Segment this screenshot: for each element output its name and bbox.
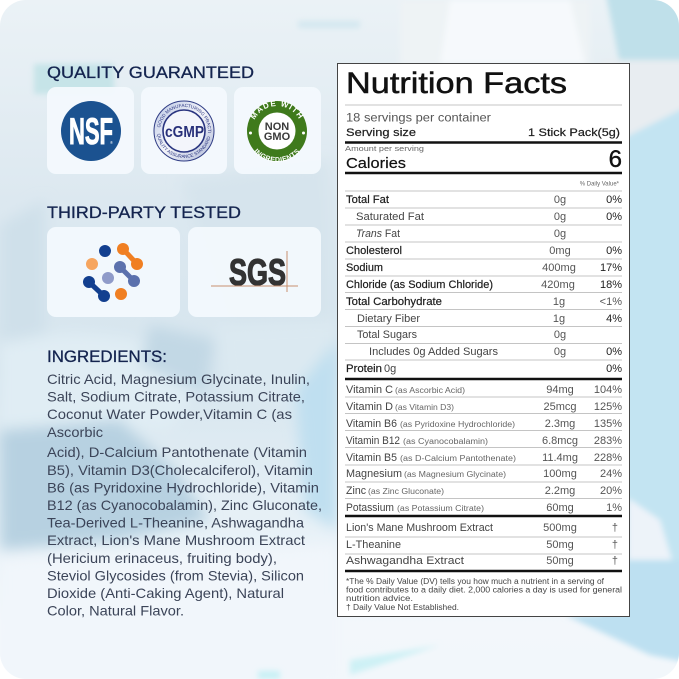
text block: ingredients list: Tea-Derived L-Theanine, Ashwagandha — [47, 514, 304, 530]
text block: ingredients list: Salt, Sodium Citrate, Potassium Citrate, — [47, 388, 305, 404]
icon: cGMP seal: QUALITY ASSURANCE STANDARD — [156, 134, 210, 158]
footnote — [346, 577, 622, 612]
row: added sugars: Includes 0g Added Sugars — [369, 346, 498, 358]
row: L-theanine: 50mg — [546, 539, 574, 551]
row: vitamin B6: 2.3mg — [545, 418, 575, 430]
calories: 6 — [609, 146, 622, 173]
row: total carbohydrate: <1% — [600, 296, 622, 308]
row: protein: 0g — [384, 363, 396, 375]
row: vitamin B12: (as Cyanocobalamin) — [403, 437, 488, 446]
icon: molecule logo — [83, 243, 143, 302]
row: total fat: Total Fat — [346, 194, 389, 206]
row: vitamin D: Vitamin D — [346, 401, 393, 413]
row: protein — [346, 363, 622, 375]
heading: ingredients: INGREDIENTS: — [47, 347, 167, 366]
row: dietary fiber — [358, 314, 622, 324]
row: dietary fiber: 4% — [606, 313, 622, 325]
row: saturated fat: Saturated Fat — [356, 211, 424, 223]
row: vitamin C: 94mg — [546, 384, 574, 396]
row: vitamin B6: Vitamin B6 — [346, 418, 397, 430]
row: cholesterol: 0mg — [549, 245, 571, 257]
row: total fat: 0g — [554, 194, 566, 206]
text block: ingredients list: Coconut Water Powder,Vitamin C (as — [47, 406, 292, 422]
heading: third-party tested: THIRD-PARTY TESTED — [47, 203, 241, 222]
icon: Non-GMO badge: MADE WITH — [250, 101, 303, 120]
row: potassium: 60mg — [546, 502, 574, 514]
heading: quality guaranteed: QUALITY GUARANTEED — [47, 63, 254, 82]
row: total carbohydrate: 1g — [553, 296, 565, 308]
row: chloride — [346, 279, 622, 291]
row: vitamin D: (as Vitamin D3) — [395, 403, 454, 412]
panel: nutrition facts — [338, 64, 630, 616]
text block: ingredients list: Dioxide (Anti-Caking Agent), Natural — [47, 585, 284, 601]
row: lion's mane: † — [612, 522, 618, 534]
row: vitamin B12: Vitamin B12 — [346, 435, 400, 447]
row: vitamin C: Vitamin C — [346, 384, 393, 396]
row: cholesterol: Cholesterol — [346, 245, 402, 257]
row: trans fat: Trans Fat — [356, 228, 400, 240]
row: vitamin D — [346, 402, 622, 412]
row: added sugars — [370, 347, 622, 358]
row: protein: 0% — [606, 363, 622, 375]
row: vitamin C: 104% — [594, 384, 622, 396]
calories — [346, 150, 622, 168]
text block: ingredients list: B12 (as Cyanocobalamin), Zinc Gluconate, — [47, 497, 322, 513]
card: lab logo — [47, 227, 180, 317]
row: L-theanine — [346, 539, 618, 551]
text block: ingredients list: Steviol Glycosides (from Stevia), Silicon — [47, 568, 304, 584]
calories: Calories — [346, 155, 406, 172]
row: chloride: 18% — [600, 279, 622, 291]
row: lion's mane: Lion's Mane Mushroom Extract — [346, 522, 493, 534]
row: magnesium: Magnesium — [346, 468, 402, 480]
icon: Non-GMO badge — [247, 101, 307, 162]
icon: Non-GMO badge: INGREDIENTS — [254, 148, 299, 162]
serving size: 1 Stick Pack(5g) — [528, 127, 620, 139]
row: sodium: Sodium — [346, 262, 383, 274]
icon: cGMP seal: cGMP — [165, 124, 204, 141]
row: zinc: 20% — [600, 485, 622, 497]
row: vitamin B6: (as Pyridoxine Hydrochloride) — [400, 420, 515, 429]
row: potassium: Potassium — [346, 502, 394, 514]
row: zinc: 2.2mg — [545, 485, 575, 497]
row: vitamin B5: 228% — [594, 452, 622, 464]
text block: ingredients list: B6 (as Pyridoxine Hydrochloride), Vitamin — [47, 480, 319, 496]
row: vitamin B5: (as D-Calcium Pantothenate) — [400, 454, 516, 463]
footnote: *The % Daily Value (DV) tells you how much a nutrient in a serving of — [346, 577, 605, 586]
text block: ingredients list: Color, Natural Flavor. — [47, 602, 184, 618]
title: Nutrition Facts — [346, 67, 567, 100]
row: lion's mane — [346, 522, 618, 534]
serving size — [346, 127, 620, 139]
row: magnesium: (as Magnesium Glycinate) — [404, 470, 506, 479]
row: vitamin C: (as Ascorbic Acid) — [395, 386, 465, 395]
text block: ingredients list: Ascorbic — [47, 424, 103, 440]
row: saturated fat: 0% — [606, 211, 622, 223]
icon: Non-GMO badge: GMO — [264, 131, 291, 143]
card: SGS — [188, 227, 321, 317]
text block: ingredients list: Extract, Lion's Mane Mushroom Extract — [47, 532, 305, 548]
row: zinc — [346, 486, 622, 496]
row: total sugars: 0g — [554, 329, 566, 341]
row: sodium — [346, 262, 622, 274]
row: chloride: 420mg — [541, 279, 575, 291]
card: cGMP — [141, 87, 227, 174]
row: vitamin C — [346, 385, 622, 396]
text block: ingredients list: B5), Vitamin D3(Cholecalciferol), Vitamin — [47, 462, 313, 478]
text block: ingredients list: (Hericium erinaceus, fruiting body), — [47, 550, 277, 566]
row: ashwagandha: Ashwagandha Extract — [346, 555, 464, 567]
row: magnesium: 24% — [600, 468, 622, 480]
row: sodium: 400mg — [542, 262, 576, 274]
row: total fat: 0% — [606, 194, 622, 206]
row: vitamin B12 — [346, 436, 622, 446]
row: vitamin B5: Vitamin B5 — [346, 452, 397, 464]
icon: cGMP seal — [154, 100, 214, 162]
icon: SGS logo: SGS — [229, 252, 286, 293]
row: protein: Protein — [346, 363, 382, 375]
daily value header: % Daily Value* — [580, 182, 620, 188]
row: ashwagandha — [346, 555, 618, 567]
footnote: † Daily Value Not Established. — [346, 603, 459, 612]
row: zinc: (as Zinc Gluconate) — [368, 487, 444, 496]
text block: ingredients list: Acid), D-Calcium Pantothenate (Vitamin — [47, 444, 307, 460]
row: added sugars: 0% — [606, 346, 622, 358]
row: lion's mane: 500mg — [543, 522, 577, 534]
row: saturated fat — [356, 212, 622, 222]
row: potassium: (as Potassium Citrate) — [397, 504, 484, 513]
row: trans fat: 0g — [554, 228, 566, 240]
serving size: Serving size — [346, 127, 416, 139]
servings per container: 18 servings per container — [346, 112, 491, 124]
row: dietary fiber: Dietary Fiber — [357, 313, 420, 325]
footnote: nutrition advice. — [346, 594, 413, 603]
row: total sugars: Total Sugars — [357, 329, 417, 341]
row: vitamin D: 125% — [594, 401, 622, 413]
row: added sugars: 0g — [554, 346, 566, 358]
row: dietary fiber: 1g — [553, 313, 565, 325]
row: ashwagandha: † — [612, 555, 618, 567]
row: cholesterol — [346, 245, 622, 257]
row: potassium — [346, 502, 622, 514]
row: vitamin B6: 135% — [594, 418, 622, 430]
row: total carbohydrate: Total Carbohydrate — [346, 296, 442, 308]
amount per serving: Amount per serving — [345, 144, 424, 153]
text block: ingredients list: Citric Acid, Magnesium Glycinate, Inulin, — [47, 371, 310, 387]
card: Non-GMO — [234, 87, 321, 174]
row: magnesium — [346, 469, 622, 480]
row: vitamin B5 — [346, 453, 622, 464]
row: total carbohydrate — [346, 296, 622, 308]
row: total fat — [346, 194, 622, 206]
row: vitamin D: 25mcg — [543, 401, 577, 413]
text block: ingredients list — [47, 371, 322, 618]
row: L-theanine: † — [612, 539, 618, 551]
icon: NSF badge: NSF — [69, 111, 113, 152]
row: vitamin B12: 6.8mcg — [542, 435, 578, 447]
row: vitamin B5: 11.4mg — [542, 452, 578, 464]
row: potassium: 1% — [606, 502, 622, 514]
icon: NSF badge: ® — [110, 140, 113, 145]
row: total sugars — [357, 330, 566, 340]
row: sodium: 17% — [600, 262, 622, 274]
card: NSF — [47, 87, 134, 174]
row: L-theanine: L-Theanine — [346, 539, 401, 551]
icon: Non-GMO badge: NON — [265, 121, 289, 133]
row: saturated fat: 0g — [554, 211, 566, 223]
row: chloride: Chloride (as Sodium Chloride) — [346, 279, 493, 291]
row: trans fat — [357, 230, 566, 240]
footnote: food contributes to a daily diet. 2,000 calories a day is used for general — [346, 586, 622, 594]
row: cholesterol: 0% — [606, 245, 622, 257]
row: magnesium: 100mg — [543, 468, 577, 480]
row: vitamin B12: 283% — [594, 435, 622, 447]
icon: NSF badge — [61, 101, 121, 161]
row: ashwagandha: 50mg — [546, 555, 574, 567]
row: vitamin B6 — [346, 419, 622, 430]
row: zinc: Zinc — [346, 485, 366, 497]
